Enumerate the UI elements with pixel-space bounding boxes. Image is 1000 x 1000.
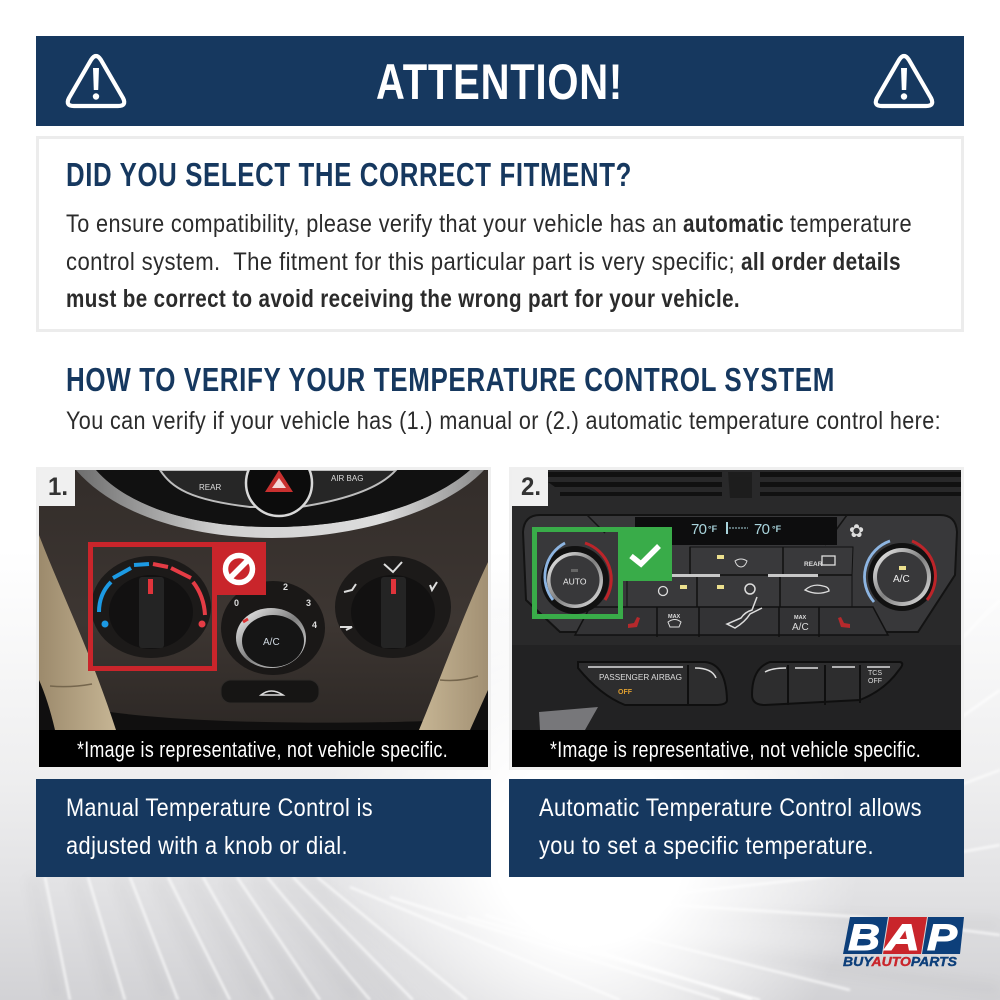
photo: manual dashboard: 4 [312, 620, 317, 630]
callout: manual description: adjusted with a knob or dial. [66, 832, 348, 860]
photo: manual dashboard [39, 450, 488, 730]
icon: left warning triangle [68, 56, 124, 106]
callout: automatic description: Automatic Temperature Control allows [539, 794, 922, 822]
text block: fitment explanation: must be correct to avoid receiving the wrong part for your vehicle. [66, 285, 740, 313]
marker: red highlight box [90, 544, 214, 668]
caption: representative image note: *Image is representative, not vehicle specific. [550, 737, 921, 762]
photo: automatic dashboard: A/C [893, 574, 910, 585]
callout: automatic description: you to set a specific temperature. [539, 832, 874, 860]
label: number 1: 1. [48, 473, 68, 501]
photo: manual dashboard: REAR [199, 483, 221, 492]
text block: fitment explanation: automatic [683, 210, 784, 238]
caption: representative image note [512, 730, 961, 767]
photo: automatic dashboard: REAR [804, 561, 823, 568]
text block: fitment explanation: control system. The fitment for this particular part is very specific; [66, 248, 735, 276]
marker: green highlight box [534, 530, 620, 616]
text block: fitment explanation: To ensure compatibility, please verify that your vehicle has an [66, 210, 677, 238]
photo: automatic dashboard: MAX [668, 614, 681, 620]
photo: automatic dashboard: 70 [754, 521, 770, 538]
photo: manual dashboard: A/C [263, 637, 280, 648]
heading: fitment question: DID YOU SELECT THE CORRECT FITMENT? [66, 156, 632, 193]
photo: manual dashboard: 2 [283, 582, 288, 592]
photo: automatic dashboard: AUTO [563, 576, 587, 586]
logo: BuyAutoParts [843, 917, 964, 969]
logo: BuyAutoParts: B [848, 917, 880, 958]
photo: automatic dashboard: OFF [868, 678, 882, 685]
callout: manual description: Manual Temperature Control is [66, 794, 373, 822]
photo: manual dashboard: 3 [306, 598, 311, 608]
title: ATTENTION! [376, 54, 623, 110]
photo: automatic dashboard: 70 [691, 521, 707, 538]
photo: automatic dashboard: PASSENGER AIRBAG [599, 673, 682, 682]
callout: automatic description [509, 779, 964, 877]
icon: prohibited sign [212, 542, 266, 595]
text block: fitment explanation: all order details [741, 248, 901, 276]
photo: automatic dashboard: OFF [618, 689, 633, 696]
photo: manual dashboard: AIR BAG [331, 474, 363, 483]
logo: BuyAutoParts: BUYAUTOPARTS [843, 954, 957, 969]
attention banner [36, 36, 964, 126]
text block: fitment explanation [66, 210, 912, 313]
logo: BuyAutoParts: A [884, 917, 920, 958]
label: number 2: 2. [521, 473, 541, 501]
photo: automatic dashboard: A/C [792, 622, 809, 633]
label: number 1 [39, 470, 75, 506]
logo: BuyAutoParts: P [927, 917, 957, 958]
photo: automatic dashboard: °F [772, 524, 782, 534]
photo: automatic dashboard: ✿ [849, 521, 864, 541]
label: number 2 [512, 470, 548, 506]
caption: representative image note [39, 730, 488, 767]
photo: automatic dashboard: TCS [868, 670, 882, 677]
panel: manual control photo [36, 450, 491, 770]
icon: right warning triangle [876, 56, 932, 106]
photo: automatic dashboard: MAX [794, 615, 807, 621]
photo: automatic dashboard: °F [708, 524, 718, 534]
text block: fitment explanation: temperature [790, 210, 912, 238]
caption: representative image note: *Image is representative, not vehicle specific. [77, 737, 448, 762]
photo: manual dashboard: 0 [234, 598, 239, 608]
panel: automatic control photo [509, 467, 964, 770]
callout: manual description [36, 779, 491, 877]
photo: automatic dashboard [512, 470, 961, 730]
icon: green check mark [618, 527, 672, 581]
panel: fitment notice [38, 138, 962, 330]
